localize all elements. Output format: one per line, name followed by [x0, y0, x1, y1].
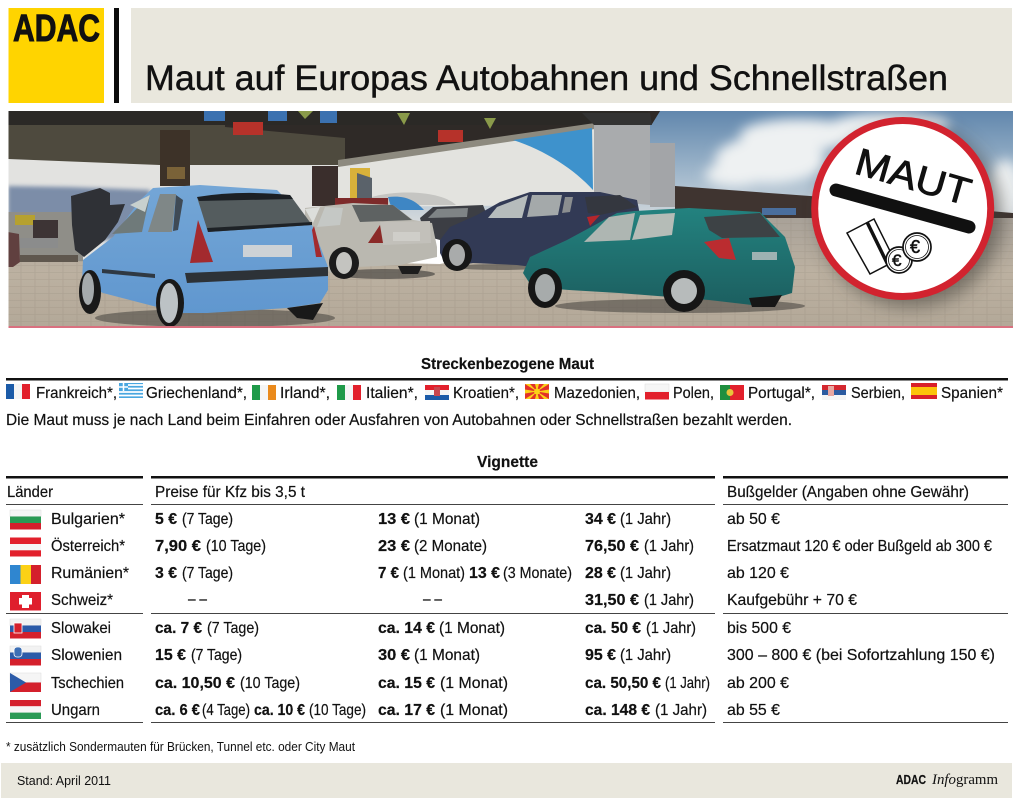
icon: Maut sign: MAUT	[851, 141, 976, 214]
row: Rumänien: Rumänien*	[51, 565, 129, 582]
flag: Spanien	[911, 383, 937, 399]
flag: Irland	[252, 385, 276, 400]
row: Ungarn: (4 Tage)	[202, 702, 250, 719]
row: Slowenien: 30 €	[378, 647, 410, 664]
row: Slowakei: ca. 14 €	[378, 620, 435, 637]
country list with flags: Frankreich*,	[36, 385, 117, 402]
country list with flags: Serbien,	[851, 385, 905, 402]
row: Slowenien	[10, 646, 995, 666]
row: Bulgarien: 34 €	[585, 511, 616, 528]
row: Österreich: Ersatzmaut 120 € oder Bußgeld ab 300 €	[727, 538, 992, 555]
row: Tschechien: (1 Jahr)	[665, 675, 710, 692]
toll canopy	[8, 111, 660, 165]
teal car	[523, 208, 795, 312]
white truck	[338, 125, 597, 207]
row: Slowakei: bis 500 €	[727, 620, 791, 637]
black divider bar	[114, 8, 119, 103]
row: Tschechien: ca. 50,50 €	[585, 675, 661, 692]
flag: Italien	[337, 385, 361, 400]
row: Ungarn	[10, 700, 780, 719]
country list with flags: Polen,	[673, 385, 714, 402]
row: Schweiz: Kaufgebühr + 70 €	[727, 592, 857, 609]
row: Ungarn: ab 55 €	[727, 702, 780, 719]
row: Österreich: 7,90 €	[155, 538, 201, 555]
small distant car	[420, 205, 488, 240]
row: Slowakei: (1 Monat)	[439, 620, 505, 637]
explanation text: Die Maut muss je nach Land beim Einfahren oder Ausfahren von Autobahnen oder Schnellstraßen bezahlt werden.	[6, 412, 792, 429]
row: Rumänien: (1 Monat)	[403, 565, 465, 582]
date: Stand: April 2011	[17, 773, 111, 788]
ADAC logo: ADAC	[13, 8, 100, 50]
left background vehicles	[8, 188, 125, 267]
row: Ungarn: Ungarn	[51, 702, 100, 719]
country list with flags: Mazedonien,	[554, 385, 640, 402]
row: Schweiz: – –	[423, 591, 442, 608]
row: Rumänien: 28 €	[585, 565, 616, 582]
row: Tschechien: (10 Tage)	[240, 675, 300, 692]
row: Rumänien	[10, 565, 789, 584]
row: Ungarn: ca. 148 €	[585, 702, 650, 719]
country list with flags: Kroatien*,	[453, 385, 519, 402]
icon: Maut sign	[815, 120, 991, 296]
country list with flags	[6, 383, 1003, 402]
footnote: * zusätzlich Sondermauten für Brücken, Tunnel etc. oder City Maut	[6, 739, 355, 754]
row: Österreich: 76,50 €	[585, 538, 639, 555]
row: Ungarn: ca. 17 €	[378, 702, 435, 719]
row: Bulgarien: (7 Tage)	[182, 511, 233, 528]
row: Bulgarien	[10, 510, 780, 530]
source credit	[896, 772, 998, 788]
row: Tschechien: Tschechien	[51, 675, 124, 692]
row: Österreich: (1 Jahr)	[644, 538, 694, 555]
row: Bulgarien: Bulgarien*	[51, 511, 125, 528]
clouds	[705, 113, 1021, 220]
source credit: gramm	[956, 772, 998, 788]
row: Österreich: (2 Monate)	[414, 538, 487, 555]
ADAC logo	[8, 8, 104, 103]
row: Slowakei: ca. 50 €	[585, 620, 641, 637]
row: Schweiz: – –	[188, 591, 207, 608]
footer bar	[1, 763, 1012, 798]
heading: Streckenbezogene Maut: Streckenbezogene Maut	[421, 356, 595, 373]
left sky and hills	[8, 159, 338, 260]
flag: Serbien	[822, 385, 846, 400]
silver car	[305, 198, 437, 279]
source credit: Info	[931, 772, 956, 788]
row: Slowenien: 95 €	[585, 647, 616, 664]
row: Ungarn: (1 Jahr)	[655, 702, 707, 719]
table header: Bußgelder (Angaben ohne Gewähr)	[727, 484, 969, 501]
row: Tschechien	[10, 673, 789, 692]
flag: Polen	[645, 384, 669, 400]
grey trailer ends	[594, 124, 650, 205]
row: Rumänien: (3 Monate)	[503, 565, 572, 582]
row: Rumänien: 3 €	[155, 565, 177, 582]
sign shadow	[820, 125, 1002, 307]
icon: Maut sign: €	[892, 251, 902, 270]
table header: Preise für Kfz bis 3,5 t	[155, 484, 306, 501]
row: Slowenien: (1 Monat)	[414, 647, 480, 664]
row: Slowakei: ca. 7 €	[155, 620, 202, 637]
row: Österreich: (10 Tage)	[206, 538, 266, 555]
row: Schweiz: (1 Jahr)	[644, 592, 694, 609]
row: Ungarn: (10 Tage)	[309, 702, 366, 719]
table header	[7, 484, 969, 501]
row: Österreich: Österreich*	[51, 537, 125, 555]
row: Slowenien: Slowenien	[51, 647, 122, 664]
flag: Frankreich	[6, 384, 30, 399]
row: Österreich	[10, 537, 992, 556]
row: Slowakei: (1 Jahr)	[646, 620, 696, 637]
country list with flags: Griechenland*,	[146, 385, 247, 402]
source credit: ADAC	[896, 772, 926, 787]
row: Bulgarien: (1 Jahr)	[620, 511, 671, 528]
flag: Griechenland	[119, 383, 143, 398]
row: Slowenien: 300 – 800 € (bei Sofortzahlung 150 €)	[727, 647, 995, 664]
row: Bulgarien: 5 €	[155, 511, 177, 528]
row: Slowakei: (7 Tage)	[207, 620, 259, 637]
row: Bulgarien: (1 Monat)	[414, 511, 480, 528]
row: Rumänien: ab 120 €	[727, 565, 789, 582]
row: Slowenien: 15 €	[155, 647, 186, 664]
icon: Maut sign: €	[910, 237, 920, 257]
row: Ungarn: ca. 6 €	[155, 702, 200, 719]
country list with flags: Irland*,	[280, 385, 330, 402]
row: Bulgarien: ab 50 €	[727, 511, 780, 528]
row: Schweiz: 31,50 €	[585, 592, 639, 609]
flag: Portugal	[720, 385, 744, 400]
row: Rumänien: 7 €	[378, 565, 399, 582]
row: Bulgarien: 13 €	[378, 511, 410, 528]
country list with flags: Spanien*	[941, 385, 1003, 402]
photo: cars at toll plaza	[8, 111, 1021, 327]
row: Ungarn: ca. 10 €	[254, 702, 305, 719]
row: Ungarn: (1 Monat)	[440, 702, 508, 719]
row: Slowenien: (7 Tage)	[191, 647, 242, 664]
country list with flags: Portugal*,	[748, 385, 815, 402]
table rules	[6, 476, 1008, 723]
row: Schweiz: Schweiz*	[51, 592, 113, 609]
row: Tschechien: (1 Monat)	[440, 675, 508, 692]
row: Tschechien: ca. 10,50 €	[155, 675, 235, 692]
title: Maut auf Europas Autobahnen und Schnellstraßen	[145, 59, 948, 98]
distant building	[675, 186, 1013, 218]
row: Slowakei: Slowakei	[51, 620, 111, 637]
flag: Mazedonien	[525, 384, 549, 399]
cobbled ground	[8, 218, 1014, 327]
row: Schweiz	[10, 591, 857, 610]
car shadows	[95, 264, 805, 327]
row: Tschechien: ab 200 €	[727, 675, 789, 692]
row: Slowenien: (1 Jahr)	[620, 647, 671, 664]
blue car	[79, 185, 328, 327]
rule	[6, 378, 1008, 380]
row: Rumänien: (7 Tage)	[182, 565, 233, 582]
heading: Vignette: Vignette	[477, 454, 538, 471]
row: Slowakei	[10, 619, 791, 638]
row: Österreich: 23 €	[378, 538, 410, 555]
table header: Länder	[7, 484, 54, 501]
row: Rumänien: 13 €	[469, 565, 500, 582]
title panel	[131, 8, 1012, 103]
row: Rumänien: (1 Jahr)	[620, 565, 671, 582]
photo bottom line	[8, 326, 1013, 328]
dark blue car	[440, 192, 640, 271]
flag: Kroatien	[425, 385, 449, 400]
country list with flags: Italien*,	[366, 385, 418, 402]
row: Tschechien: ca. 15 €	[378, 675, 435, 692]
